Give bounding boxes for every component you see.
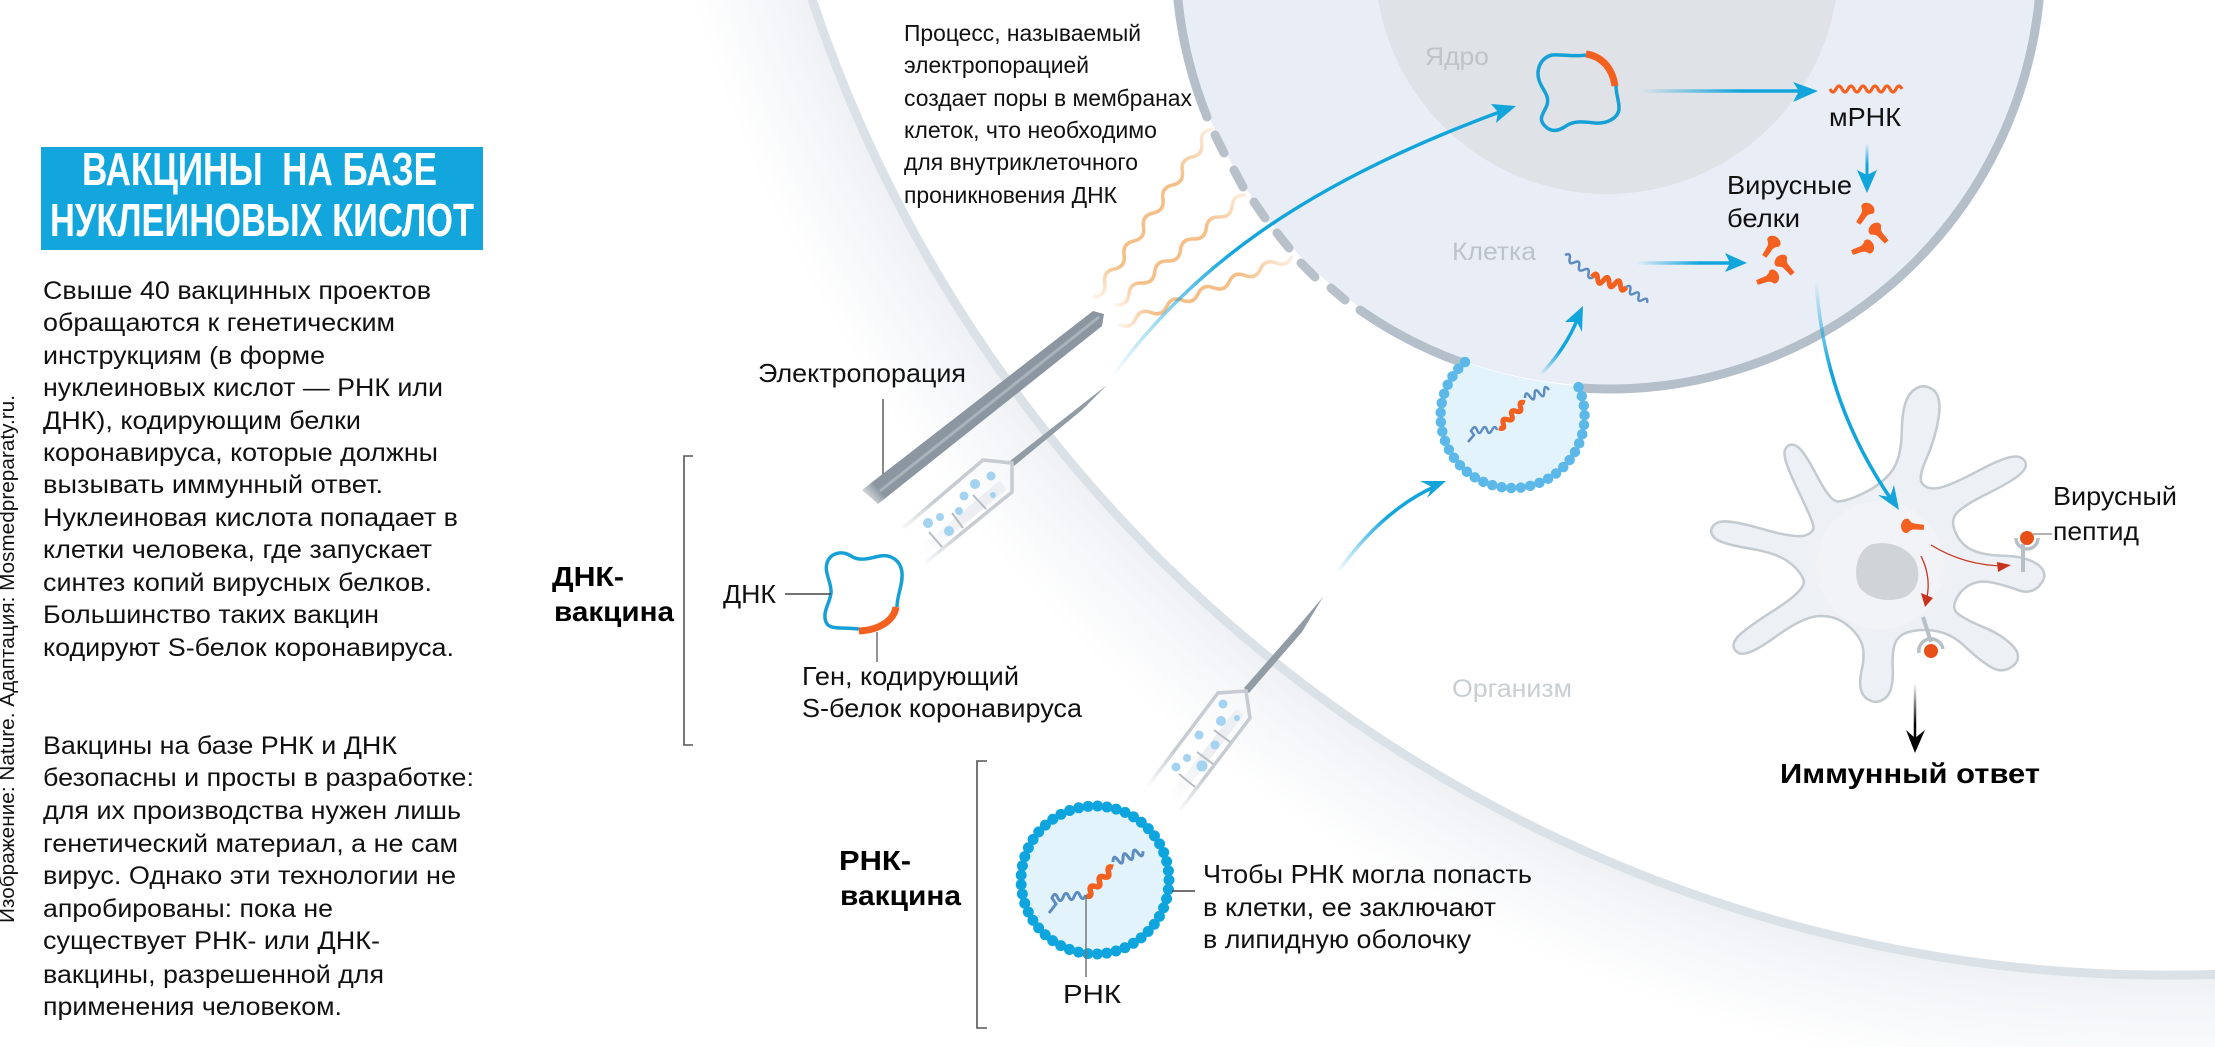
mRNA strand	[1830, 86, 1902, 92]
text block: safety	[43, 732, 474, 1021]
text block: intro	[43, 277, 458, 662]
title banner: НУКЛЕИНОВЫХ КИСЛОТ	[50, 194, 474, 246]
DNA vaccine heading: вакцина	[554, 596, 674, 627]
text block: safety: вирус. Однако эти технологии не	[43, 862, 456, 890]
text block: safety: генетический материал, а не сам	[43, 830, 458, 858]
electroporation explanation	[904, 20, 1192, 208]
RNA strand in cell	[1565, 254, 1647, 303]
electroporation electrode	[862, 311, 1104, 504]
electroporation explanation: клеток, что необходимо	[904, 117, 1157, 143]
arrow: nucleus to mRNA	[1639, 82, 1818, 102]
lipid shell explanation	[1172, 859, 1532, 954]
viral proteins: group left	[1755, 233, 1798, 289]
gene label: Ген, кодирующий	[802, 661, 1019, 691]
cell nucleus	[1375, 0, 1839, 194]
DNA label: ДНК	[723, 579, 776, 609]
electroporation explanation: электропорацией	[904, 52, 1089, 78]
gene label	[802, 632, 1083, 723]
text block: intro: синтез копий вирусных белков.	[43, 569, 432, 597]
electroporation waves	[1095, 129, 1292, 326]
viral proteins label	[1727, 170, 1852, 233]
RNA vaccine heading: РНК-	[839, 845, 911, 876]
merging liposome	[1441, 362, 1585, 488]
DNA in nucleus	[1538, 54, 1619, 130]
DNA vaccine bracket	[684, 456, 693, 745]
text block: safety: апробированы: пока не	[43, 895, 333, 923]
text block: intro: Нуклеиновая кислота попадает в	[43, 504, 458, 532]
text block: intro: кодируют S-белок коронавируса.	[43, 634, 454, 662]
electroporation explanation: для внутриклеточного	[904, 149, 1138, 175]
text block: safety: существует РНК- или ДНК-	[43, 927, 380, 955]
DNA label	[723, 579, 831, 609]
text block: intro: клетки человека, где запускает	[43, 536, 433, 564]
RNA vaccine bracket	[977, 761, 987, 1028]
viral peptide label	[2053, 481, 2177, 546]
electroporation explanation: проникновения ДНК	[904, 182, 1117, 208]
label: organism: Организм	[1452, 675, 1572, 703]
arrow: proteins to dendritic cell	[1816, 280, 1899, 510]
lipid shell explanation: в клетки, ее заключают	[1203, 892, 1496, 922]
viral proteins label: Вирусные	[1727, 170, 1852, 200]
text block: safety: вакцины, разрешенной для	[43, 961, 384, 989]
RNA label	[1063, 895, 1121, 1009]
title banner	[41, 143, 483, 250]
arrow: strand to proteins	[1635, 253, 1747, 272]
DNA syringe	[903, 385, 1107, 563]
RNA label: РНК	[1063, 979, 1121, 1009]
DNA plasmid	[825, 553, 902, 631]
viral proteins label: белки	[1727, 203, 1800, 233]
arrow: liposome to cytoplasm	[1540, 306, 1583, 375]
text block: intro: инструкциям (в форме	[43, 342, 325, 370]
cell body with membrane	[1177, 0, 2040, 389]
viral proteins: group right	[1850, 200, 1892, 259]
DNA vaccine heading: ДНК-	[552, 561, 624, 592]
receptor with peptide: right	[2016, 531, 2052, 572]
arrow: RNA syringe to cell	[1337, 481, 1446, 573]
DNA vaccine heading	[552, 561, 674, 627]
viral peptide label: пептид	[2053, 516, 2139, 546]
text block: intro: коронавируса, которые должны	[43, 439, 438, 467]
text block: safety: Вакцины на базе РНК и ДНК	[43, 732, 397, 760]
mRNA label: мРНК	[1829, 102, 1901, 132]
viral peptide label: Вирусный	[2053, 481, 2177, 511]
title banner: ВАКЦИНЫ НА БАЗЕ	[82, 143, 437, 195]
text block: safety: для их производства нужен лишь	[43, 797, 461, 825]
text block: intro: нуклеиновых кислот — РНК или	[43, 374, 443, 402]
text block: intro: Свыше 40 вакцинных проектов	[43, 277, 431, 305]
arrow: DNA into nucleus	[1112, 104, 1516, 377]
text block: intro: Большинство таких вакцин	[43, 601, 379, 629]
gene label: S-белок коронавируса	[802, 693, 1083, 723]
RNA syringe	[1147, 597, 1323, 810]
label: cell: Клетка	[1452, 238, 1536, 266]
electroporation callout: Электропорация	[758, 358, 966, 388]
label: nucleus: Ядро	[1425, 43, 1489, 71]
RNA vaccine heading: вакцина	[840, 880, 961, 911]
text block: intro: обращаются к генетическим	[43, 309, 395, 337]
arrow: immune response	[1906, 683, 1925, 753]
immune response label: Иммунный ответ	[1780, 758, 2040, 789]
text block: intro: вызывать иммунный ответ.	[43, 471, 383, 499]
RNA lipid nanoparticle	[1021, 806, 1169, 954]
dendritic cell nucleus	[1856, 543, 1918, 600]
lipid shell explanation: Чтобы РНК могла попасть	[1203, 859, 1532, 889]
receptor with peptide: bottom	[1919, 617, 1943, 658]
text block: safety: применения человеком.	[43, 993, 342, 1021]
dendritic cell	[1714, 389, 2042, 699]
protein inside dendritic cell	[1900, 518, 1925, 535]
red processing arrows	[1921, 545, 2011, 607]
lipid shell explanation: в липидную оболочку	[1203, 924, 1471, 954]
text block: safety: безопасны и просты в разработке:	[43, 764, 474, 792]
electroporation explanation: создает поры в мембранах	[904, 85, 1192, 111]
RNA vaccine heading	[839, 845, 961, 911]
arrow: mRNA to proteins	[1857, 143, 1877, 193]
text block: intro: ДНК), кодирующим белки	[43, 407, 361, 435]
electroporation explanation: Процесс, называемый	[904, 20, 1141, 46]
